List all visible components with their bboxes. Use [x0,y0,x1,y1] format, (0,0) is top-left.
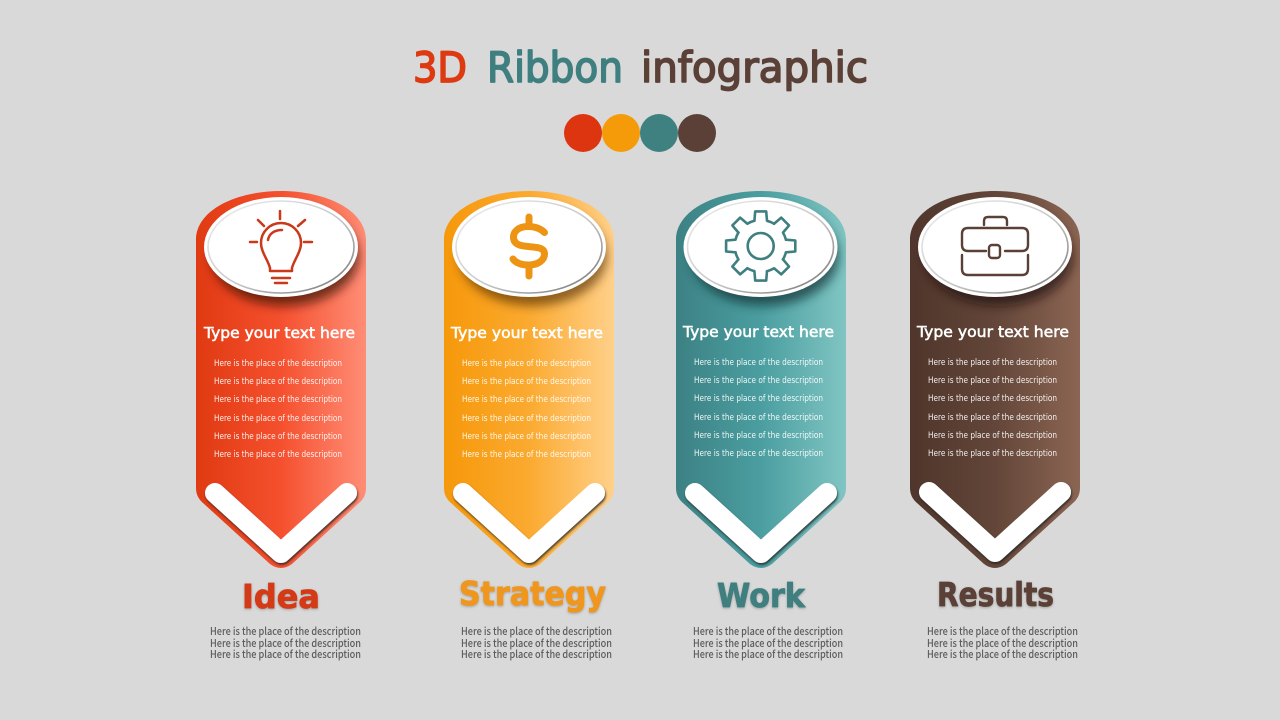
description list: Here is the place of the description [214,395,342,405]
title: Ribbon [487,43,623,92]
label: Work: Work [717,576,806,615]
description list: Here is the place of the description [694,376,823,386]
ribbon body with badge and chevron [444,191,614,568]
caption: Results: Here is the place of the description [927,624,1078,639]
description list: Here is the place of the description [928,449,1057,459]
description list [462,359,591,460]
description list: Here is the place of the description [462,450,591,460]
caption: Idea: Here is the place of the description [210,647,361,662]
caption: Strategy: Here is the place of the description [461,636,612,651]
description list: Here is the place of the description [462,395,591,405]
caption: Results: Here is the place of the description [927,636,1078,651]
description list: Here is the place of the description [928,431,1057,441]
caption: Strategy: Here is the place of the description [461,647,612,662]
description list: Here is the place of the description [694,358,823,368]
icon: gear [726,211,795,281]
description list: Here is the place of the description [694,431,823,441]
icon: briefcase [962,217,1028,275]
icon: light bulb [250,211,312,283]
description list: Here is the place of the description [462,414,591,424]
panel: strategy ribbon [444,191,614,568]
label: Results: Results [937,575,1054,614]
description list: Here is the place of the description [462,432,591,442]
panel heading: Type your text here [682,323,834,341]
description list: Here is the place of the description [928,394,1057,404]
caption: Idea [210,624,361,662]
description list [928,358,1057,459]
panel heading: Type your text here [450,324,603,342]
caption: Work: Here is the place of the description [693,647,843,662]
panel: idea ribbon [196,191,366,568]
title [413,43,868,92]
label: Idea: Idea [242,577,320,616]
infographic canvas [196,49,1080,660]
description list: Here is the place of the description [694,413,823,423]
description list: Here is the place of the description [694,449,823,459]
panel: work ribbon [676,191,846,568]
description list: Here is the place of the description [694,394,823,404]
title: 3D [413,43,467,92]
description list: Here is the place of the description [462,359,591,369]
description list: Here is the place of the description [462,377,591,387]
description list: Here is the place of the description [928,358,1057,368]
description list: Here is the place of the description [928,376,1057,386]
label: Strategy: Strategy [459,574,606,613]
description list: Here is the place of the description [214,432,342,442]
description list [214,359,342,460]
description list: Here is the place of the description [928,413,1057,423]
description list: Here is the place of the description [214,377,342,387]
description list: Here is the place of the description [214,414,342,424]
description list [694,358,823,459]
caption: Work: Here is the place of the description [693,624,843,639]
caption: Idea: Here is the place of the description [210,624,361,639]
ribbon body with badge and chevron [196,191,366,568]
colour dots [564,114,716,152]
ribbon body with badge and chevron [676,191,846,568]
panel: results ribbon [910,191,1080,568]
caption: Results [927,624,1078,662]
caption: Work [693,624,843,662]
title: infographic [641,43,868,92]
description list: Here is the place of the description [214,359,342,369]
caption: Strategy: Here is the place of the description [461,624,612,639]
caption: Results: Here is the place of the description [927,647,1078,662]
description list: Here is the place of the description [214,450,342,460]
panel heading: Type your text here [203,324,355,342]
ribbon body with badge and chevron [910,191,1080,568]
caption: Idea: Here is the place of the description [210,636,361,651]
caption: Work: Here is the place of the description [693,636,843,651]
icon: dollar sign [513,217,544,276]
panel heading: Type your text here [916,323,1069,341]
caption: Strategy [461,624,612,662]
